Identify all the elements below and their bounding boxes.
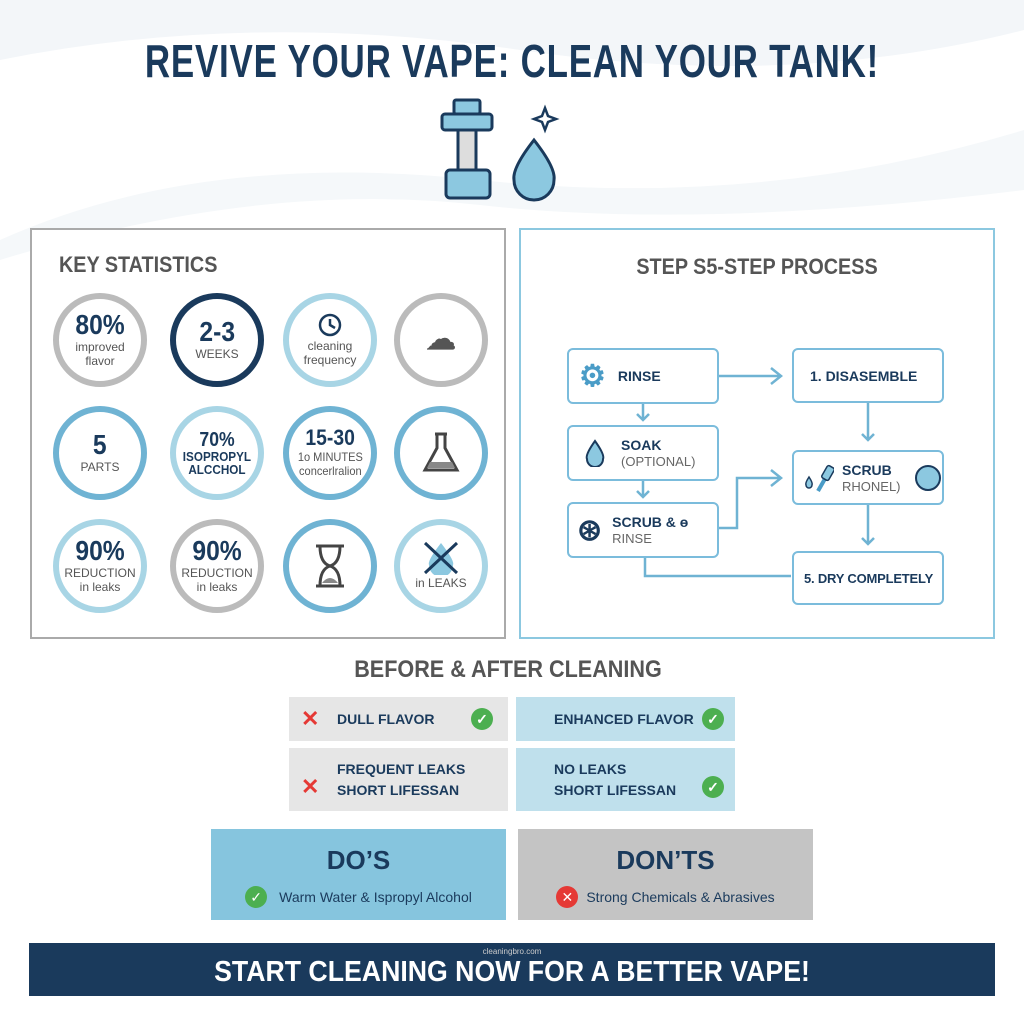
before row 1	[289, 697, 508, 741]
panel: don'ts: ✕	[561, 888, 573, 904]
footer banner	[29, 943, 995, 996]
panel: don'ts: DON’TS	[616, 845, 715, 875]
before row 2	[289, 748, 508, 811]
footer banner: START CLEANING NOW FOR A BETTER VAPE!	[214, 956, 810, 988]
stat: 5 parts	[53, 406, 147, 500]
stat: 5 parts: PARTS	[81, 460, 119, 474]
step: dry	[792, 551, 944, 605]
stat: 2-3 weeks	[170, 293, 264, 387]
background waves	[0, 0, 1024, 260]
after row 1	[516, 697, 735, 741]
stat: 90%	[53, 519, 147, 613]
before row 2: FREQUENT LEAKS	[337, 760, 465, 776]
icon: tank and drop	[440, 98, 560, 202]
stat: 70%: ALCCHOL	[188, 462, 246, 477]
step: soak: (OPTIONAL)	[621, 454, 695, 469]
stat: 15-30: 1o MINUTES	[297, 450, 363, 464]
stat: cleaning frequency	[283, 293, 377, 387]
stat: 90%: REDUCTION	[64, 566, 136, 580]
after row 1: ENHANCED FLAVOR	[554, 711, 694, 727]
before row 1: ✕	[301, 706, 319, 731]
after row 2: ✓	[707, 778, 719, 794]
stat: 70%: 70%	[199, 429, 235, 451]
stat: 15-30: 15-30	[305, 425, 355, 450]
stat: 90% b: in leaks	[197, 580, 237, 594]
stat: 15-30: concerlralion	[299, 464, 361, 478]
stat: 15-30	[283, 406, 377, 500]
step: scrub & rinse: ⊛	[577, 514, 602, 546]
stat: flask	[394, 406, 488, 500]
stat: icon: ☁︎	[426, 323, 456, 356]
step: disassemble: 1. DISASEMBLE	[810, 368, 917, 384]
stat: no leaks	[394, 519, 488, 613]
panel: do's: Warm Water & Ispropyl Alcohol	[279, 889, 472, 905]
title: REVIVE YOUR VAPE: CLEAN YOUR TANK!	[145, 35, 879, 87]
before row 1: ✓	[476, 710, 488, 726]
stat: 80%	[53, 293, 147, 387]
panel: do's	[211, 829, 506, 920]
stat: 80%: improved	[75, 340, 125, 354]
step: scrub: RHONEL)	[842, 478, 901, 494]
after row 2	[516, 748, 735, 811]
step: scrub: SCRUB	[842, 462, 892, 478]
stat: 90% b: 90%	[192, 535, 242, 566]
after row 2: SHORT LIFESSAN	[554, 782, 676, 798]
step: soak	[567, 425, 719, 481]
step: scrub & rinse	[567, 502, 719, 558]
stat: 70%	[170, 406, 264, 500]
stat: 80%: 80%	[75, 309, 125, 340]
step: scrub & rinse: SCRUB & ɵ	[612, 514, 688, 530]
footer banner: cleaningbro.com	[483, 947, 541, 956]
step: dry: 5. DRY COMPLETELY	[804, 570, 933, 586]
stat: 90%: in leaks	[80, 580, 120, 594]
stat: hourglass	[283, 519, 377, 613]
stat: 70%: ISOPROPYL	[183, 449, 251, 464]
stat: 90%: 90%	[75, 535, 125, 566]
step: scrub	[792, 450, 944, 505]
step: soak: SOAK	[621, 437, 661, 453]
stat: icon	[394, 293, 488, 387]
stat: 90% b: REDUCTION	[181, 566, 253, 580]
stat: no leaks: in LEAKS	[415, 576, 467, 590]
panel: don'ts: Strong Chemicals & Abrasives	[586, 889, 775, 905]
arrows: process connectors	[636, 367, 875, 578]
before row 2: SHORT LIFESSAN	[337, 782, 459, 798]
heading: before & after: BEFORE & AFTER CLEANING	[354, 656, 662, 683]
stat: cleaning frequency: frequency	[304, 353, 356, 367]
step: rinse	[567, 348, 719, 404]
after row 2: NO LEAKS	[554, 760, 626, 776]
panel: do's: DO’S	[327, 845, 390, 875]
panel: don'ts	[518, 829, 813, 920]
panel: key statistics	[30, 228, 506, 639]
step: disassemble	[792, 348, 944, 403]
before row 1: DULL FLAVOR	[337, 711, 434, 727]
stat: 2-3 weeks: 2-3	[199, 316, 235, 347]
step: scrub & rinse: RINSE	[612, 531, 652, 546]
stat: 90% b	[170, 519, 264, 613]
stat: 2-3 weeks: WEEKS	[195, 347, 239, 361]
stat: 5 parts: 5	[93, 429, 107, 460]
stat: 80%: flavor	[85, 354, 115, 368]
step: rinse: ⚙	[579, 360, 606, 392]
after row 1: ✓	[707, 710, 719, 726]
panel: process	[519, 228, 995, 639]
heading: process: STEP S5-STEP PROCESS	[636, 254, 878, 279]
step: rinse: RINSE	[618, 368, 661, 384]
stat: cleaning frequency: cleaning	[308, 339, 352, 353]
panel: do's: ✓	[250, 888, 262, 904]
heading: key statistics: KEY STATISTICS	[59, 252, 217, 277]
before row 2: ✕	[301, 774, 319, 799]
